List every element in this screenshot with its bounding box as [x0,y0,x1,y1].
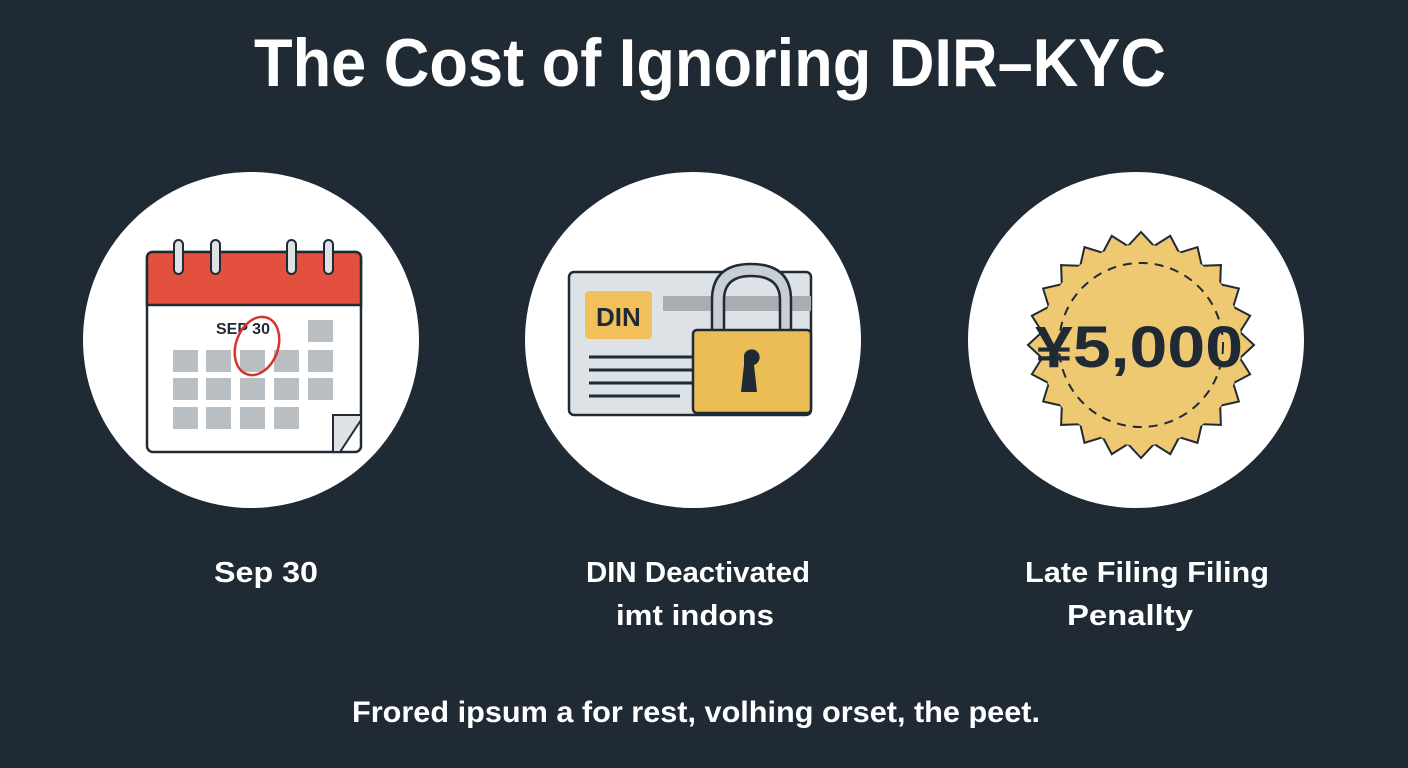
label: imt indons: imt indons [616,600,774,632]
label: DIN Deactivated: DIN Deactivated [586,557,810,589]
footer text: Frored ipsum a for rest, volhing orset, the peet. [352,696,1040,729]
icon: locked DIN card: DIN [596,302,641,332]
icon: calendar: SEP 30 [216,321,270,338]
label: Late Filing: Late Filing Filing [1025,557,1269,589]
icon: locked DIN card [569,264,811,415]
label: Sep 30: Sep 30 [214,557,318,589]
panel: deadline [83,172,419,508]
label: Penalty: Penallty [1067,600,1193,632]
panel: penalty [968,172,1304,508]
icon: calendar [147,240,361,452]
panel: DIN [525,172,861,508]
icon: seal [1028,232,1254,458]
icon: seal: ¥5,000 [1035,315,1243,380]
title: The Cost of Ignoring DIR–KYC [254,25,1166,101]
